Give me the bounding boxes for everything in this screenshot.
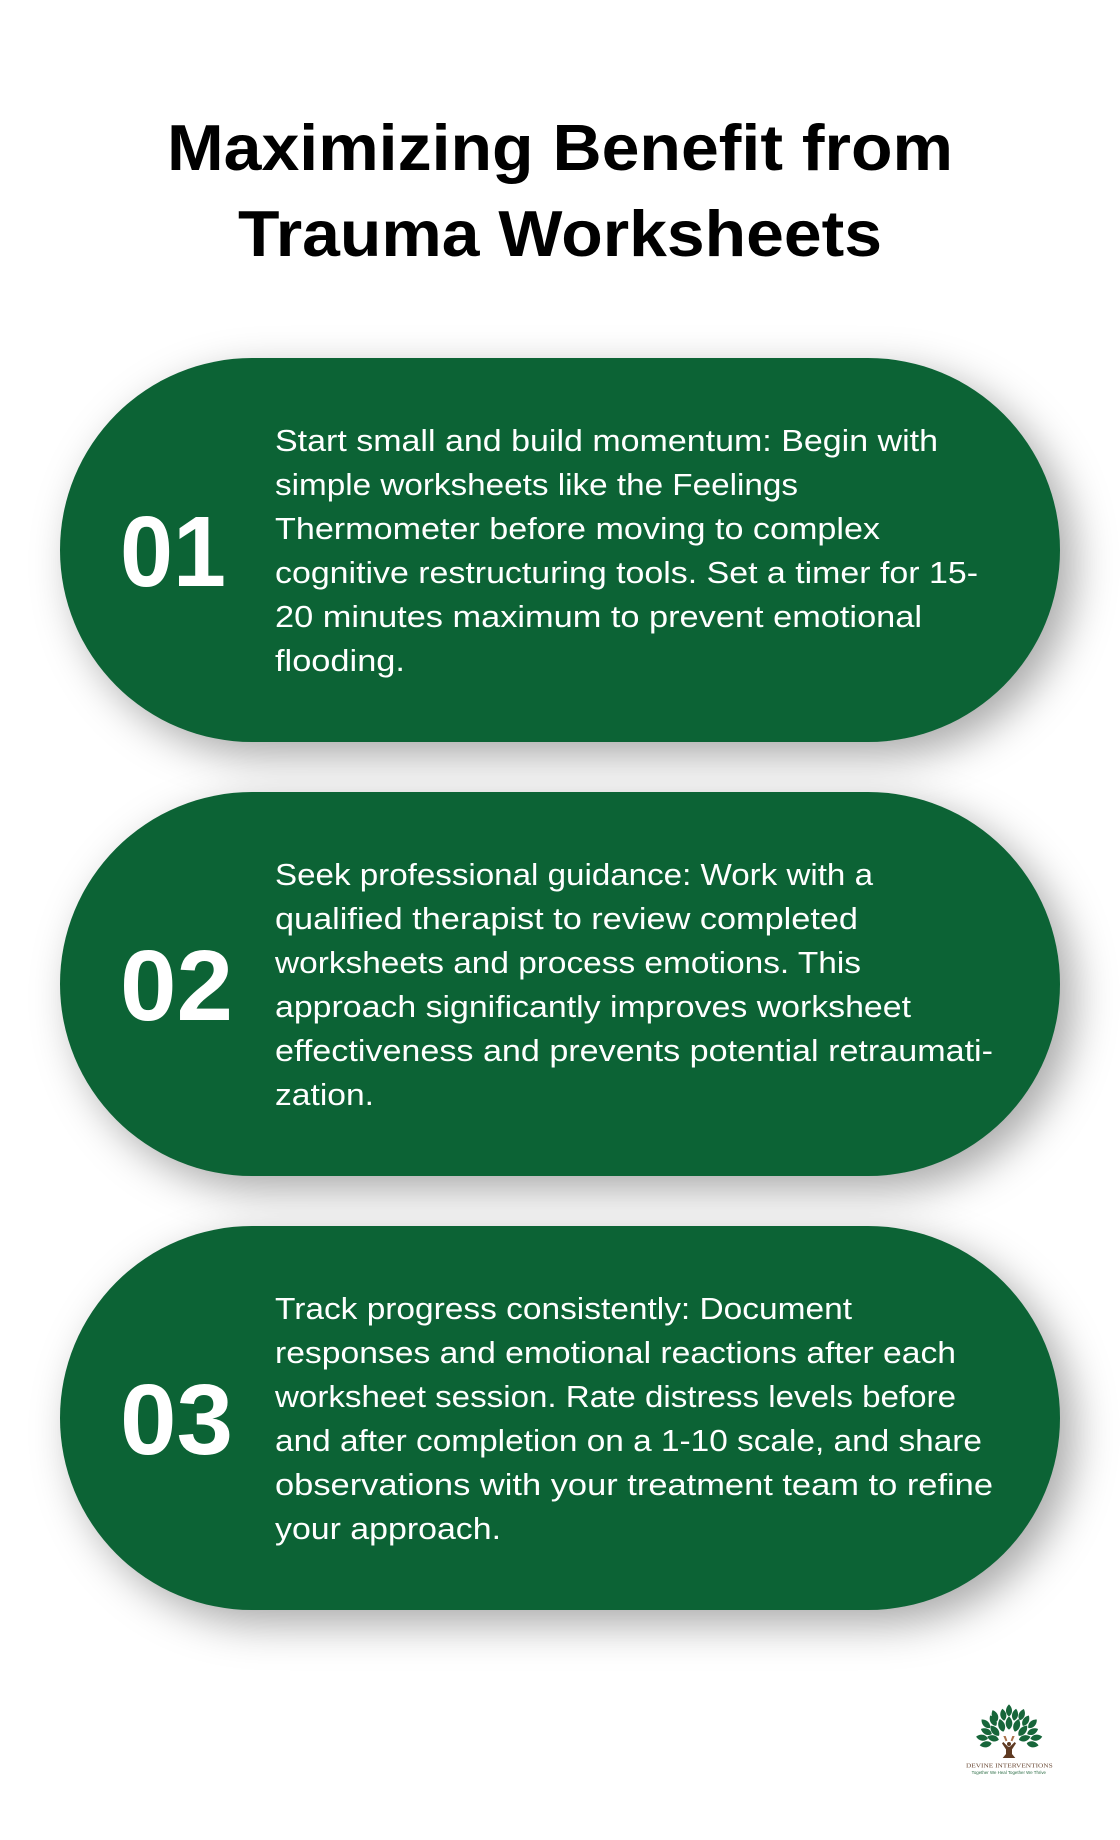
step 03 text: your approach.	[275, 1511, 501, 1546]
step 03 text: Track progress consistently: Document	[275, 1291, 852, 1326]
step 03 text	[274, 1291, 993, 1546]
step 03 text: responses and emotional reactions after each	[275, 1335, 956, 1370]
panel: step 01	[60, 358, 1060, 742]
title: Maximizing Benefit from	[167, 111, 953, 184]
step 01 text: Thermometer before moving to complex	[275, 511, 881, 546]
step 01 text: cognitive restructuring tools. Set a timer for 15-	[275, 555, 978, 590]
step 01 text: simple worksheets like the Feelings	[275, 467, 798, 502]
step 01 text: 20 minutes maximum to prevent emotional	[275, 599, 922, 634]
step 02 text: effectiveness and prevents potential retraumati-	[275, 1033, 993, 1068]
step 02 text	[274, 857, 993, 1112]
step 03 text: worksheet session. Rate distress levels before	[274, 1379, 956, 1414]
step 02 text: Seek professional guidance: Work with a	[275, 857, 874, 892]
step 03 text: and after completion on a 1-10 scale, and share	[275, 1423, 982, 1458]
icon: tree leaves	[976, 1704, 1043, 1748]
number 02: 02	[120, 930, 233, 1042]
title	[167, 111, 953, 270]
panel: step 03	[60, 1226, 1060, 1610]
logo tagline: Together We Heal Together We Thrive	[972, 1770, 1047, 1775]
number 01: 01	[120, 496, 226, 608]
step 01 text	[275, 423, 978, 678]
panel: step 02	[60, 792, 1060, 1176]
logo: Devine Interventions tree	[966, 1704, 1053, 1775]
icon: tree trunk figure	[1002, 1736, 1016, 1758]
step 02 text: zation.	[275, 1077, 374, 1112]
step 02 text: qualified therapist to review completed	[275, 901, 858, 936]
title: Trauma Worksheets	[238, 197, 882, 270]
step 01 text: flooding.	[275, 643, 405, 678]
step 02 text: worksheets and process emotions. This	[274, 945, 861, 980]
number 03: 03	[120, 1364, 233, 1476]
step 02 text: approach significantly improves worksheet	[275, 989, 911, 1024]
logo name: DEVINE INTERVENTIONS	[966, 1762, 1053, 1769]
step 03 text: observations with your treatment team to refine	[275, 1467, 993, 1502]
step 01 text: Start small and build momentum: Begin with	[275, 423, 938, 458]
